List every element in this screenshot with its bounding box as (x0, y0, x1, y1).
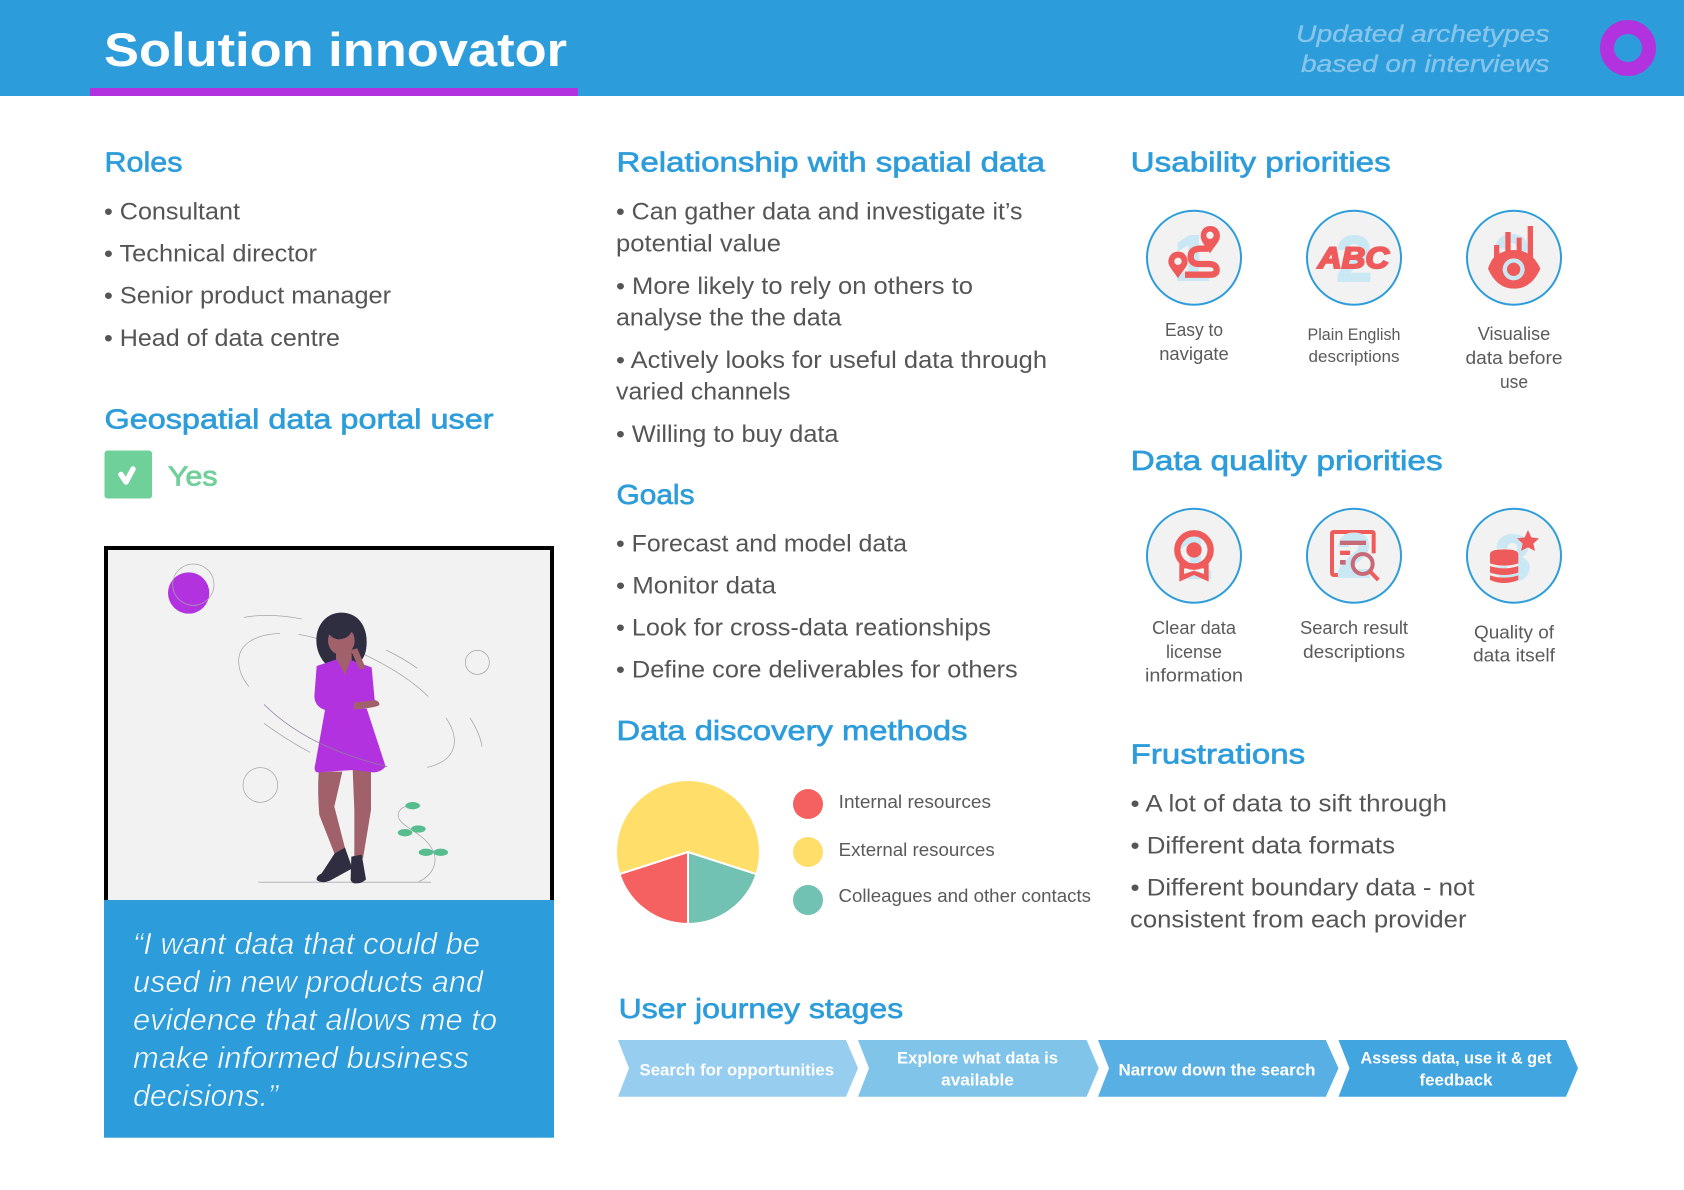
frustrations list (1130, 790, 1475, 934)
goals list (616, 530, 1018, 683)
heading: roles: Roles (104, 146, 182, 178)
quote text: used in new products and (133, 964, 485, 999)
relationship list: analyse the the data (616, 305, 842, 332)
label: visualise data (1466, 323, 1562, 392)
label: plain english: Plain English (1308, 325, 1400, 344)
heading: portal user: Geospatial data portal user (104, 404, 494, 434)
relationship list: • Willing to buy data (616, 421, 839, 448)
label: easy to navigate (1159, 319, 1229, 364)
label: quality of data: data itself (1473, 645, 1556, 666)
label: clear license (1145, 617, 1243, 686)
roles list: • Head of data centre (104, 325, 340, 352)
goals list: • Monitor data (616, 573, 776, 600)
subtitle: based on interviews (1301, 51, 1550, 78)
relationship list (616, 199, 1047, 448)
purple circle (168, 572, 209, 614)
label: plain english: descriptions (1308, 347, 1400, 366)
stage 4 arrow: feedback (1420, 1072, 1493, 1090)
quote text: evidence that allows me to (133, 1002, 497, 1037)
stage 1 arrow: Search for opportunities (640, 1062, 834, 1080)
icon: quality of data: 3 (1495, 522, 1531, 594)
label: visualise data: use (1500, 371, 1528, 392)
stage 4 arrow: Assess data, use it & get (1360, 1050, 1552, 1068)
label: clear license: license (1166, 641, 1222, 662)
title underline (90, 88, 578, 96)
icon: clear license (1147, 509, 1241, 603)
panel: quote (104, 900, 554, 1138)
panel: goals (616, 479, 1018, 683)
panel: portal user (104, 404, 494, 498)
heading: goals: Goals (616, 479, 694, 510)
legend (793, 789, 1091, 915)
stage 3 arrow (1098, 1040, 1338, 1097)
label: visualise data: Visualise (1478, 323, 1550, 344)
icon: easy to navigate (1147, 211, 1241, 305)
label: easy to navigate: Easy to (1165, 319, 1223, 340)
label: search result descriptions: descriptions (1303, 641, 1405, 662)
quote text (133, 926, 497, 1113)
icon: visualise data: 3 (1494, 222, 1530, 294)
label: visualise data: data before (1466, 347, 1562, 368)
heading: usability: Usability priorities (1131, 146, 1391, 178)
label: plain english (1308, 325, 1400, 366)
icon: plain english: 2 (1336, 223, 1372, 295)
label: clear license: Clear data (1152, 617, 1237, 638)
heading: relationship: Relationship with spatial data (616, 146, 1046, 178)
quote text: make informed business (133, 1040, 469, 1075)
icon: visualise data (1467, 211, 1561, 305)
stage 2 arrow: Explore what data is (897, 1050, 1058, 1068)
icon: clear license: 1 (1176, 520, 1212, 592)
panel: relationship with spatial data (616, 146, 1047, 448)
label: search result descriptions: Search result (1300, 617, 1408, 638)
pie chart (616, 780, 760, 924)
goals list: • Look for cross-data reationships (616, 615, 991, 642)
panel: user journey stages (618, 993, 1578, 1097)
plant leaves (398, 802, 448, 856)
icon: plain english (1307, 211, 1401, 305)
stage 4 arrow (1338, 1040, 1578, 1097)
icon: search result descriptions: 2 (1337, 522, 1371, 591)
relationship list: • Actively looks for useful data through (616, 347, 1047, 374)
heading: data discovery: Data discovery methods (616, 715, 968, 746)
frustrations list: consistent from each provider (1130, 906, 1466, 934)
legend: External resources (839, 839, 995, 860)
stage 3 arrow: Narrow down the search (1118, 1062, 1316, 1080)
illustration panel: woman thinking (106, 548, 552, 902)
roles list (104, 199, 391, 352)
subtitle: Updated archetypes (1296, 21, 1550, 48)
legend: Internal resources (839, 791, 991, 812)
subtitle (1296, 21, 1550, 78)
header banner (0, 0, 1684, 96)
icon: plain english: ABC (1317, 242, 1390, 275)
frustrations list: • Different boundary data - not (1130, 874, 1475, 901)
yes label: Yes (168, 460, 218, 492)
panel: usability priorities (1131, 146, 1562, 392)
stage 2 arrow: available (941, 1072, 1014, 1090)
icon: green check box (104, 450, 152, 498)
quote text: “I want data that could be (133, 926, 480, 961)
title: Solution innovator (104, 23, 567, 76)
ground line (258, 882, 431, 883)
relationship list: varied channels (616, 379, 790, 406)
heading: user journey: User journey stages (619, 993, 903, 1024)
label: easy to navigate: navigate (1159, 343, 1229, 364)
stage 2 arrow (858, 1040, 1099, 1097)
roles list: • Senior product manager (104, 283, 391, 310)
relationship list: potential value (616, 230, 781, 258)
heading: data quality: Data quality priorities (1131, 445, 1443, 476)
foreground orbit line (264, 704, 387, 767)
frustrations list: • A lot of data to sift through (1130, 790, 1447, 818)
label: clear license: information (1145, 665, 1243, 686)
icon: quality of data (1467, 509, 1561, 603)
goals list: • Define core deliverables for others (616, 656, 1018, 683)
panel: roles (104, 146, 391, 352)
heading: frustrations: Frustrations (1131, 738, 1305, 770)
figure: woman (314, 613, 386, 883)
decorative orbit lines (173, 564, 489, 882)
icon: easy to navigate: 1 (1174, 222, 1210, 294)
roles list: • Technical director (104, 241, 317, 268)
panel: data quality priorities (1131, 445, 1561, 686)
relationship list: • Can gather data and investigate it’s (616, 199, 1022, 226)
label: quality of data (1473, 621, 1556, 666)
frustrations list: • Different data formats (1130, 832, 1395, 859)
icon: search result descriptions (1307, 509, 1401, 603)
stage 1 arrow (618, 1040, 858, 1097)
goals list: • Forecast and model data (616, 530, 907, 558)
relationship list: • More likely to rely on others to (616, 273, 973, 300)
icon: archetype ring (1607, 27, 1649, 69)
legend: Colleagues and other contacts (838, 885, 1091, 906)
roles list: • Consultant (104, 199, 240, 226)
label: search result descriptions (1300, 617, 1408, 662)
panel: frustrations (1130, 738, 1475, 934)
quote text: decisions.” (133, 1078, 280, 1113)
label: quality of data: Quality of (1474, 621, 1555, 642)
panel: data discovery methods (616, 715, 1091, 924)
